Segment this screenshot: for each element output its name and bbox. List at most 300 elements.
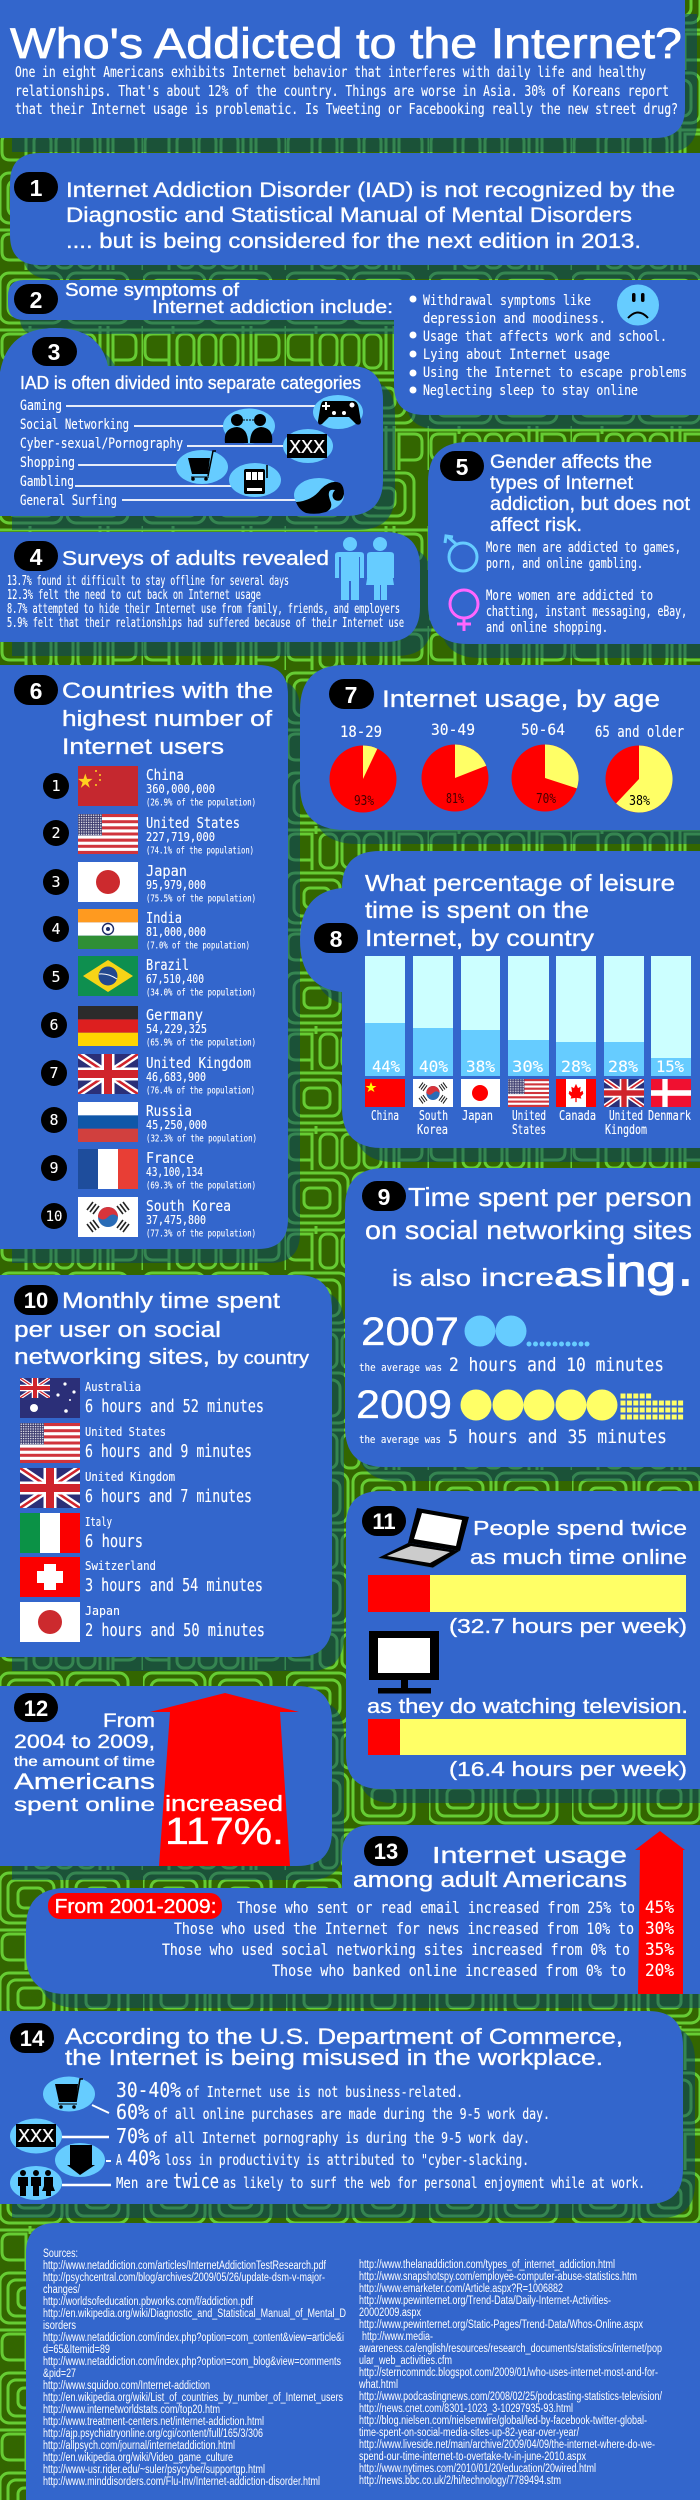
- sources left column: http://psychcentral.com/blog/archives/2009/05/26/update-dsm-v-major-: [43, 2272, 325, 2284]
- row United States: United States: [85, 1424, 166, 1439]
- panel: 9 social networking time: [345, 1168, 700, 1467]
- sources left column: http://www.netaddiction.com/index.php?option=com_content&view=article&i: [43, 2332, 344, 2344]
- countries heading: [62, 678, 273, 759]
- statement text: Diagnostic and Statistical Manual of Mental Disorders: [66, 204, 632, 227]
- monthly heading: by country: [217, 1348, 309, 1368]
- workplace line 2: [116, 2100, 550, 2124]
- icon: XXX with connector: [10, 2118, 109, 2154]
- sources left column: http://www.minddisorders.com/Flu-Inv/Internet-addiction-disorder.html: [43, 2476, 320, 2488]
- arrow: usage rise with percentages: 35%: [645, 1940, 674, 1960]
- sources right column: http://www.thelanaddiction.com/types_of_internet_addiction.html: [359, 2259, 615, 2271]
- stat 2007: 2 hours and 10 minutes: [449, 1354, 664, 1376]
- pie chart 50-64: [512, 720, 579, 812]
- workplace line 4: A: [116, 2151, 122, 2169]
- bar United Kingdom: United: [609, 1109, 643, 1124]
- category labels: Cyber-sexual/Pornography: [20, 436, 183, 452]
- sources left column: http://worldsofeducation.pbworks.com/f/addiction.pdf: [43, 2296, 254, 2308]
- bar China: China: [371, 1109, 399, 1124]
- women text: More women are addicted to: [486, 588, 653, 604]
- sources right column: http://www.emarketer.com/Article.aspx?R=1006882: [359, 2283, 563, 2295]
- monthly heading: Monthly time spent: [62, 1288, 281, 1313]
- number badge 10: [14, 1285, 58, 1315]
- icon: XXX sign: XXX: [289, 437, 325, 458]
- country 5 Brazil: [43, 956, 256, 998]
- country 1 China: 360,000,000: [146, 781, 215, 796]
- category labels: Shopping: [20, 455, 75, 471]
- workplace heading: According to the U.S. Department of Commerce,: [65, 2024, 623, 2049]
- row United Kingdom: [20, 1468, 252, 1508]
- workplace line 3: of all Internet pornography is during the 9-5 work day.: [154, 2129, 530, 2147]
- panel: 10 monthly time: [0, 1275, 332, 1657]
- icon: television: [369, 1631, 439, 1694]
- adults heading: Internet usage: [432, 1842, 627, 1868]
- row Australia: [20, 1378, 264, 1418]
- men text: [486, 540, 681, 572]
- workplace line 2: 60%: [116, 2100, 149, 2124]
- social heading: is also: [392, 1265, 471, 1291]
- symptoms list: depression and moodiness.: [423, 311, 606, 327]
- panel: 4 surveys: [0, 532, 420, 642]
- leisure heading: What percentage of leisure: [365, 870, 675, 896]
- bar United Kingdom: Kingdom: [605, 1123, 647, 1138]
- bar South Korea: [413, 956, 453, 1138]
- bar Japan: [461, 956, 500, 1124]
- sources left column: [43, 2248, 346, 2488]
- sources left column: http://ajp.psychiatryonline.org/cgi/content/full/165/3/306: [43, 2428, 263, 2440]
- pie chart 18-29: 93%: [354, 794, 374, 809]
- arrow: 117 percent increase: increased: [165, 1791, 283, 1816]
- television hours label: (16.4 hours per week): [449, 1758, 687, 1781]
- pie chart 50-64: 70%: [536, 792, 556, 807]
- bar Canada: 28%: [561, 1057, 591, 1076]
- country 6 Germany: Germany: [146, 1006, 203, 1024]
- countries heading: Countries with the: [62, 678, 273, 703]
- number badge 10: 10: [24, 1288, 48, 1313]
- icon: surfing wave: [294, 478, 344, 514]
- adults heading: among adult Americans: [353, 1867, 627, 1892]
- sources left column: http://www.treatment-centers.net/internet-addiction.html: [43, 2416, 264, 2428]
- category labels: [20, 398, 315, 509]
- sources right column: spend-our-time-internet-to-overtake-tv-in-june-2010.aspx: [359, 2451, 586, 2463]
- increase text: 2004 to 2009,: [14, 1731, 155, 1753]
- symptoms list: Neglecting sleep to stay online: [423, 383, 638, 399]
- country 4 India: 4: [51, 920, 61, 938]
- sources left column: http://www.netaddiction.com/index.php?option=com_blog&view=comments: [43, 2356, 341, 2368]
- countries heading: highest number of: [62, 706, 273, 731]
- bar South Korea: 40%: [419, 1057, 448, 1076]
- row United Kingdom: 6 hours and 7 minutes: [85, 1486, 252, 1507]
- icon: game controller: [313, 395, 363, 429]
- bar United States: [508, 956, 549, 1138]
- country 5 Brazil: 67,510,400: [146, 971, 204, 986]
- country 8 Russia: 45,250,000: [146, 1117, 207, 1132]
- usage heading: Internet usage, by age: [382, 686, 660, 713]
- country 7 United Kingdom: United Kingdom: [146, 1054, 251, 1072]
- row United States: 6 hours and 9 minutes: [85, 1441, 252, 1462]
- bar Denmark: 15%: [656, 1057, 684, 1076]
- workplace line 3: 70%: [116, 2124, 149, 2148]
- bar: online hours: [368, 1575, 686, 1612]
- sources right column: http://www.pewinternet.org/Trend-Data/Daily-Internet-Activities-: [359, 2295, 611, 2307]
- online heading: as much time online: [470, 1547, 687, 1569]
- row Italy: 6 hours: [85, 1531, 143, 1552]
- number badge 1: 1: [30, 175, 43, 201]
- panel: header: [0, 0, 685, 138]
- symptoms list: Lying about Internet usage: [423, 347, 610, 363]
- bar United States: United: [512, 1109, 546, 1124]
- icon: XXX sign: [283, 429, 333, 463]
- sources right column: http://www.nytimes.com/2010/01/20/education/20wired.html: [359, 2463, 596, 2475]
- workplace line 4: loss in productivity is attributed to "cyber-slacking.: [165, 2151, 529, 2169]
- usage lines: [162, 1898, 635, 1980]
- panel: sources: [26, 2223, 700, 2500]
- country 5 Brazil: 5: [51, 968, 61, 986]
- survey results: 8.7% attempted to hide their Internet use from family, friends, and employers: [7, 602, 400, 617]
- number badge 5: 5: [456, 454, 469, 480]
- workplace heading: the Internet is being misused in the workplace.: [65, 2045, 603, 2070]
- bar United States: 30%: [512, 1057, 543, 1076]
- statement text: [66, 179, 675, 253]
- icon: laptop: [378, 1508, 469, 1568]
- country 7 United Kingdom: 7: [49, 1064, 59, 1082]
- panel: 13 usage among adults: [26, 1825, 700, 1994]
- country 3 Japan: 95,979,000: [146, 877, 206, 892]
- gender heading: [490, 452, 691, 536]
- countries heading: Internet users: [62, 734, 224, 759]
- icon: XXX with connector: XXX: [18, 2126, 54, 2147]
- sources right column: [358, 2259, 663, 2487]
- arrow: usage rise with percentages: 45%: [645, 1898, 674, 1918]
- category labels: Gambling: [20, 474, 74, 490]
- pie chart 30-49: 30-49: [431, 720, 475, 739]
- title: Who's Addicted to the Internet?: [10, 20, 682, 68]
- country 8 Russia: [41, 1102, 257, 1144]
- country 10 South Korea: [41, 1197, 256, 1240]
- social heading: [365, 1182, 692, 1296]
- survey results: 5.9% felt that their relationships had suffered because of their Internet use: [7, 616, 404, 631]
- television heading: as they do watching television.: [367, 1695, 688, 1718]
- country 1 China: (26.9% of the population): [146, 798, 256, 808]
- sources right column: time-spent-on-social-media-sites-up-82-year-over-year/: [359, 2427, 580, 2439]
- icon: social networking people: [223, 408, 275, 444]
- country 1 China: [43, 766, 256, 808]
- icon: three people with connector: [10, 2166, 111, 2200]
- workplace line 1: [116, 2078, 463, 2102]
- number badge 13: 13: [374, 1839, 398, 1864]
- social heading: as: [554, 1256, 603, 1293]
- panel: 8 leisure time: [300, 851, 700, 1148]
- country 6 Germany: 54,229,325: [146, 1021, 207, 1036]
- pie chart 65 and older: 38%: [629, 794, 650, 809]
- number badge 11: 11: [372, 1509, 396, 1534]
- bar United Kingdom: [604, 956, 647, 1138]
- bar United States: States: [512, 1123, 546, 1138]
- sources right column: http://www.media-: [362, 2331, 433, 2343]
- number badge 3: [32, 337, 77, 366]
- survey results: [7, 574, 404, 631]
- online hours label: (32.7 hours per week): [449, 1615, 687, 1638]
- number badge 11: [362, 1506, 406, 1536]
- sources left column: http://www-usr.rider.edu/~suler/psycyber/supportgp.html: [43, 2464, 265, 2476]
- number badge 7: 7: [345, 682, 357, 708]
- leisure heading: [365, 870, 675, 951]
- country 9 France: (69.3% of the population): [146, 1180, 256, 1192]
- bar Canada: Canada: [559, 1109, 596, 1124]
- arrow: 117 percent increase: [150, 1693, 299, 1866]
- survey results: 13.7% found it difficult to stay offline for several days: [7, 574, 289, 589]
- row Australia: Australia: [85, 1379, 141, 1394]
- row Japan: 2 hours and 50 minutes: [85, 1620, 265, 1641]
- country 6 Germany: 6: [49, 1016, 59, 1034]
- pie chart 18-29: 18-29: [340, 722, 382, 741]
- number badge 5: [440, 451, 484, 481]
- country 3 Japan: 3: [51, 873, 61, 891]
- row Japan: [20, 1602, 265, 1642]
- country 9 France: 9: [49, 1159, 59, 1177]
- workplace line 3: [116, 2124, 530, 2148]
- panel: 2 symptoms: [8, 280, 700, 415]
- country 9 France: [41, 1149, 256, 1192]
- bar Canada: [556, 956, 596, 1124]
- panel: 14 workplace: [0, 2011, 683, 2204]
- women text: and online shopping.: [486, 620, 608, 636]
- number badge 3: 3: [48, 339, 60, 365]
- usage lines: Those who banked online increased from 0% to: [272, 1961, 626, 1980]
- panel: 11 online vs television: [346, 1491, 700, 1789]
- icon: cart with connector: [43, 2076, 109, 2113]
- row Japan: Japan: [85, 1603, 120, 1618]
- panel: 3 categories: [0, 328, 383, 516]
- number badge 13: [364, 1836, 408, 1866]
- sources left column: http://www.squidoo.com/Internet-addiction: [43, 2380, 210, 2392]
- icon: down arrow with connector: [55, 2143, 111, 2177]
- symptoms heading: [65, 280, 393, 317]
- icon: shopping cart: [176, 450, 228, 484]
- country 7 United Kingdom: (76.4% of the population): [146, 1086, 255, 1096]
- stat 2009: [356, 1383, 684, 1448]
- icon: female symbol: [450, 590, 478, 631]
- number badge 12: 12: [24, 1696, 48, 1721]
- pie chart 30-49: [422, 720, 488, 812]
- survey results: 12.3% felt the need to cut back on Internet usage: [7, 588, 261, 603]
- workplace line 1: 30-40%: [116, 2078, 181, 2102]
- country 8 Russia: Russia: [146, 1102, 192, 1120]
- date range tag: From 2001-2009:: [54, 1896, 216, 1918]
- bar China: [365, 956, 405, 1124]
- category labels: Gaming: [20, 398, 62, 414]
- workplace line 1: of Internet use is not business-related.: [186, 2083, 463, 2101]
- increase text: spent online: [14, 1794, 155, 1816]
- country 6 Germany: (65.9% of the population): [146, 1038, 256, 1048]
- country 2 United States: 2: [51, 824, 61, 842]
- panel: 7 usage by age: [300, 665, 700, 830]
- stat 2009: 2009: [356, 1383, 452, 1427]
- sources left column: http://en.wikipedia.org/wiki/Video_game_culture: [43, 2452, 233, 2464]
- row Switzerland: Switzerland: [85, 1558, 156, 1573]
- number badge 8: 8: [330, 926, 343, 952]
- statement text: Internet Addiction Disorder (IAD) is not recognized by the: [66, 179, 675, 202]
- bar South Korea: Korea: [417, 1123, 448, 1138]
- increase text: [14, 1710, 155, 1816]
- number badge 2: [14, 284, 58, 314]
- bar Japan: Japan: [462, 1109, 493, 1124]
- row United Kingdom: United Kingdom: [85, 1469, 175, 1484]
- country 5 Brazil: (34.0% of the population): [146, 988, 256, 998]
- number badge 4: 4: [30, 544, 43, 570]
- surveys heading: Surveys of adults revealed: [62, 547, 329, 570]
- arrow: 117 percent increase: 117%.: [165, 1811, 284, 1853]
- country 7 United Kingdom: [41, 1054, 255, 1096]
- sources left column: http://allpsych.com/journal/internetaddiction.html: [43, 2440, 235, 2452]
- gender heading: affect risk.: [490, 515, 582, 536]
- icon: slot machine: [229, 463, 281, 497]
- number badge 12: [14, 1693, 58, 1722]
- icon: man and woman: [335, 537, 394, 600]
- categories heading: IAD is often divided into separate categories: [20, 373, 361, 393]
- number badge 4: [14, 541, 58, 571]
- number badge 8: [314, 923, 358, 953]
- country 2 United States: [43, 814, 254, 856]
- pie chart 18-29: [330, 722, 396, 812]
- sources right column: http://news.bbc.co.uk/2/hi/technology/7789494.stm: [359, 2475, 561, 2487]
- number badge 6: [14, 675, 58, 705]
- row Switzerland: [20, 1557, 263, 1597]
- monthly heading: per user on social: [14, 1317, 221, 1342]
- intro text: [15, 63, 678, 118]
- stat 2009: 5 hours and 35 minutes: [448, 1426, 667, 1448]
- symptoms list: Withdrawal symptoms like: [423, 293, 591, 309]
- country 2 United States: United States: [146, 814, 240, 832]
- country 10 South Korea: 37,475,800: [146, 1212, 206, 1227]
- country 4 India: 81,000,000: [146, 924, 206, 939]
- increase text: From: [103, 1710, 155, 1732]
- country 7 United Kingdom: 46,683,900: [146, 1069, 206, 1084]
- bar Japan: 38%: [466, 1057, 495, 1076]
- workplace line 4: [116, 2146, 529, 2170]
- workplace line 5: Men are: [116, 2174, 168, 2192]
- panel: 5 gender: [428, 442, 700, 644]
- sources left column: isorders: [43, 2320, 76, 2332]
- country 2 United States: (74.1% of the population): [146, 846, 254, 856]
- bar South Korea: South: [419, 1109, 448, 1124]
- number badge 7: [329, 679, 374, 709]
- stat 2007: the average was: [359, 1361, 442, 1374]
- bar China: 44%: [372, 1057, 400, 1076]
- workplace line 5: [116, 2169, 645, 2193]
- country 3 Japan: (75.5% of the population): [146, 894, 256, 904]
- social heading: ing: [605, 1247, 676, 1296]
- panel: 12 increase: [0, 1686, 332, 1866]
- country 1 China: 1: [51, 777, 61, 795]
- number badge 14: [10, 2023, 54, 2053]
- bar Denmark: [648, 956, 691, 1124]
- increase text: Americans: [14, 1769, 155, 1794]
- workplace heading: [65, 2024, 623, 2070]
- country 10 South Korea: (77.3% of the population): [146, 1228, 256, 1240]
- statement text: .... but is being considered for the next edition in 2013.: [66, 230, 641, 253]
- stat 2007: 2007: [361, 1310, 459, 1354]
- leisure heading: time is spent on the: [365, 897, 589, 923]
- women text: [486, 588, 687, 636]
- increase text: the amount of time: [14, 1754, 155, 1769]
- category labels: General Surfing: [20, 493, 117, 509]
- arrow: usage rise with percentages: [635, 1831, 685, 1994]
- sources right column: 20002009.aspx: [359, 2307, 421, 2319]
- category labels: Social Networking: [20, 417, 129, 433]
- row Australia: 6 hours and 52 minutes: [85, 1396, 264, 1417]
- adults heading: [353, 1842, 627, 1892]
- monthly heading: networking sites,: [14, 1344, 210, 1369]
- icon: male symbol: [445, 536, 477, 571]
- country 1 China: China: [146, 766, 184, 784]
- social heading: .: [679, 1244, 692, 1296]
- country 10 South Korea: 10: [46, 1209, 62, 1225]
- stat 2009: the average was: [359, 1433, 441, 1446]
- gender heading: addiction, but does not: [490, 494, 691, 515]
- sources left column: changes/: [43, 2284, 81, 2296]
- sources right column: http://news.cnet.com/8301-1023_3-10297935-93.html: [359, 2403, 573, 2415]
- country 4 India: (7.0% of the population): [146, 940, 250, 952]
- workplace line 2: of all online purchases are made during the 9-5 work day.: [154, 2105, 550, 2123]
- leisure heading: Internet, by country: [365, 925, 594, 951]
- stat 2007: [359, 1310, 664, 1376]
- country 4 India: [43, 909, 250, 952]
- country 10 South Korea: South Korea: [146, 1197, 231, 1215]
- number badge 6: 6: [30, 678, 42, 704]
- sources left column: &pid=27: [43, 2368, 76, 2380]
- number badge 9: [362, 1181, 406, 1211]
- country 6 Germany: [41, 1006, 256, 1048]
- sources left column: Sources:: [43, 2248, 78, 2260]
- gender heading: Gender affects the: [490, 452, 652, 473]
- pie chart 65 and older: [595, 722, 684, 812]
- country 2 United States: 227,719,000: [146, 829, 215, 844]
- gender heading: types of Internet: [490, 473, 634, 494]
- arrow: usage rise with percentages: 30%: [645, 1919, 674, 1939]
- symptoms heading: Some symptoms of: [65, 280, 240, 300]
- number badge 9: 9: [378, 1184, 390, 1210]
- social heading: Time spent per person: [408, 1182, 692, 1212]
- symptoms heading: Internet addiction include:: [152, 297, 393, 317]
- row Switzerland: 3 hours and 54 minutes: [85, 1575, 263, 1596]
- row Italy: Italy: [85, 1514, 112, 1529]
- row Italy: [20, 1513, 143, 1553]
- pie chart 50-64: 50-64: [521, 720, 565, 739]
- workplace line 4: 40%: [127, 2146, 160, 2170]
- sources right column: ular_web_activities.cfm: [359, 2355, 452, 2367]
- panel: 6 countries: [0, 665, 288, 1249]
- country 8 Russia: 8: [49, 1111, 59, 1129]
- bar: television hours: [368, 1719, 686, 1755]
- bar United Kingdom: 28%: [608, 1057, 638, 1076]
- icon: sad face: [617, 284, 659, 326]
- symptoms list: [410, 293, 687, 399]
- workplace line 5: twice: [173, 2169, 219, 2193]
- country 4 India: India: [146, 909, 182, 927]
- social heading: on social networking sites: [365, 1215, 692, 1245]
- sources left column: http://www.internetworldstats.com/top20.htm: [43, 2404, 220, 2416]
- country 9 France: France: [146, 1149, 194, 1167]
- online heading: People spend twice: [473, 1518, 687, 1540]
- number badge 1: [14, 172, 58, 202]
- men text: porn, and online gambling.: [486, 556, 643, 572]
- sources left column: http://www.netaddiction.com/articles/InternetAddictionTestResearch.pdf: [43, 2260, 327, 2272]
- number badge 14: 14: [20, 2026, 45, 2051]
- sources right column: what.html: [358, 2379, 398, 2391]
- sources left column: http://en.wikipedia.org/wiki/Diagnostic_and_Statistical_Manual_of_Mental_D: [43, 2308, 346, 2320]
- number badge 2: 2: [30, 287, 42, 313]
- sources left column: http://en.wikipedia.org/wiki/List_of_countries_by_number_of_Internet_users: [43, 2392, 343, 2404]
